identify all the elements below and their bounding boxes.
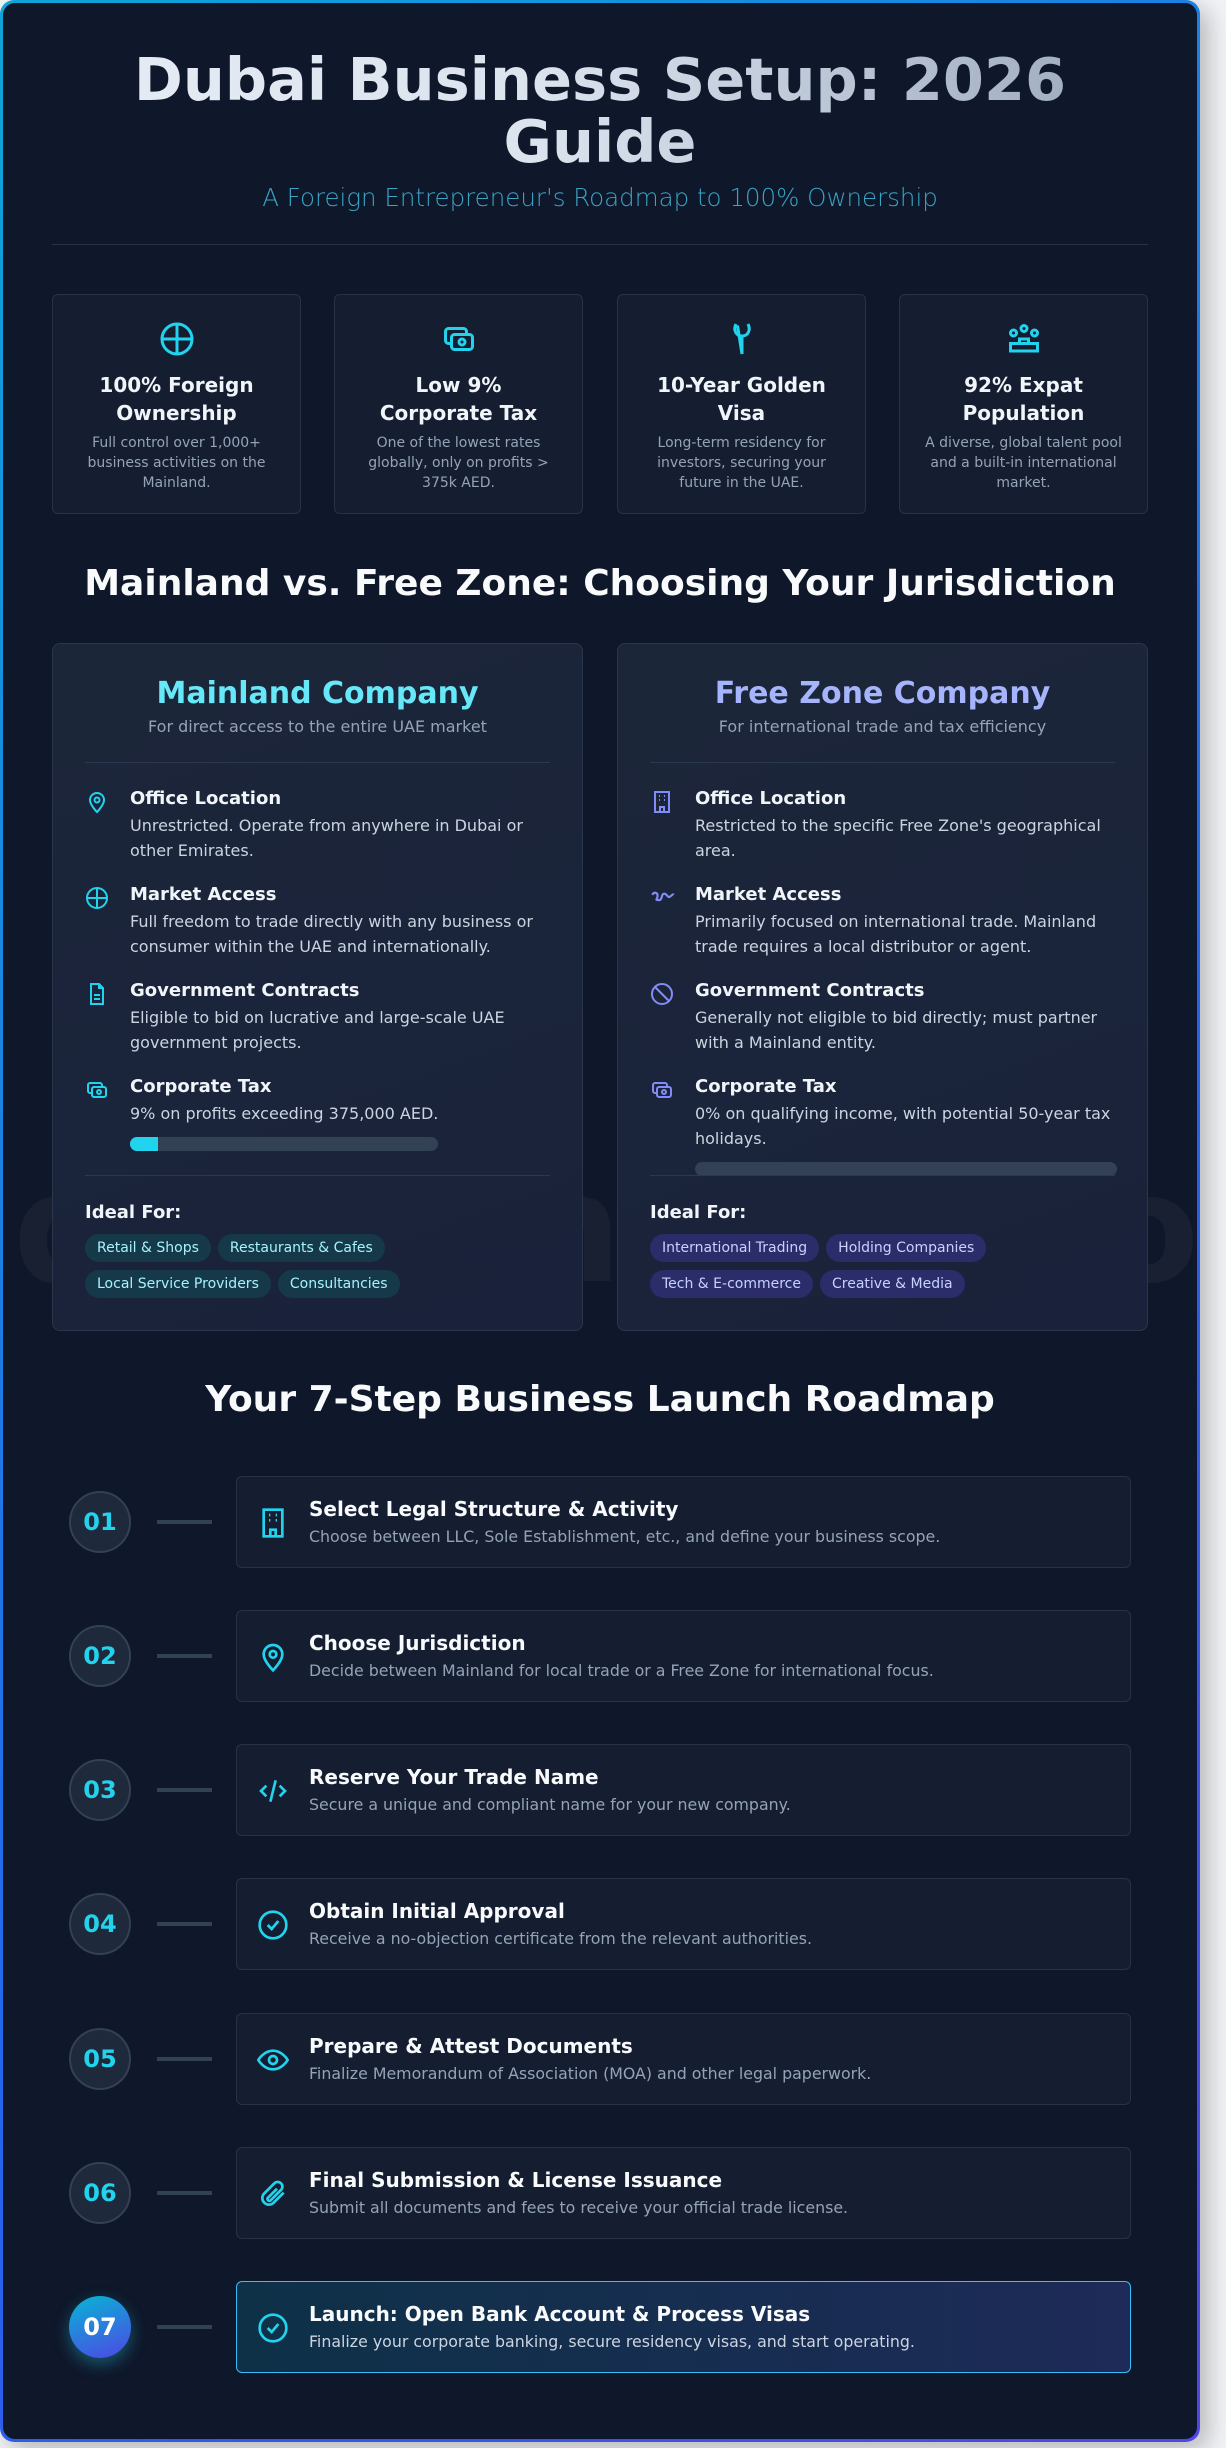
step 5: Finalize Memorandum of Association (MOA) and other legal paperwork. <box>309 2064 871 2083</box>
step 2: Choose Jurisdiction <box>309 1631 526 1655</box>
bar: 0% tax <box>695 1162 1117 1176</box>
title: Guide <box>504 107 696 176</box>
step 2 <box>69 1610 1131 1702</box>
stat: golden visa: Visa <box>718 401 765 425</box>
stat: golden visa: Long-term residency for investors, securing your future in the UAE. <box>657 435 826 491</box>
tags: Restaurants & Cafes <box>230 1240 373 1256</box>
item: government contracts: Generally not eligible to bid directly; must partner with a Mainland entity. <box>695 1008 1097 1052</box>
step 6: Final Submission & License Issuance <box>309 2168 722 2192</box>
step 4: Obtain Initial Approval <box>309 1899 565 1923</box>
item: office location: Restricted to the specific Free Zone's geographical area. <box>695 816 1101 860</box>
panel: mainland: Mainland Company <box>156 676 479 711</box>
step 6: 06 <box>83 2179 117 2207</box>
step 1: 01 <box>83 1508 117 1536</box>
item: office location: Office Location <box>130 788 281 809</box>
bar: 9% tax <box>130 1137 438 1151</box>
stat: corporate tax: One of the lowest rates globally, only on profits > 375k AED. <box>368 435 549 491</box>
icon: people <box>1009 324 1039 352</box>
icon: visa <box>733 323 751 354</box>
item: market access: Full freedom to trade directly with any business or consumer within the UAE and internationally. <box>130 912 533 956</box>
step 3: 03 <box>83 1776 117 1804</box>
step 6 <box>69 2147 1131 2239</box>
ideal for: Ideal For: <box>650 1202 746 1223</box>
tags: Consultancies <box>290 1276 388 1292</box>
step 4 <box>69 1878 1131 1970</box>
item: government contracts <box>90 980 505 1052</box>
step 6: Submit all documents and fees to receive your official trade license. <box>309 2198 848 2217</box>
stat: golden visa: 10-Year Golden <box>657 373 826 397</box>
item: market access: Market Access <box>130 884 276 905</box>
title <box>3 49 1197 173</box>
item: corporate tax <box>87 1076 438 1123</box>
step 3: Secure a unique and compliant name for your new company. <box>309 1795 791 1814</box>
step 7: 07 <box>83 2313 117 2341</box>
stat: golden visa <box>617 294 866 514</box>
item: market access: Primarily focused on international trade. Mainland trade requires a local distributor or agent. <box>695 912 1096 956</box>
stat: foreign ownership: 100% Foreign <box>99 373 254 397</box>
tags <box>650 1234 986 1298</box>
item: government contracts: Eligible to bid on lucrative and large-scale UAE government projects. <box>130 1008 505 1052</box>
stat: foreign ownership: Full control over 1,000+ business activities on the Mainland. <box>88 435 265 491</box>
step 2: Decide between Mainland for local trade or a Free Zone for international focus. <box>309 1661 934 1680</box>
item: corporate tax: Corporate Tax <box>130 1076 272 1097</box>
step 7: Finalize your corporate banking, secure residency visas, and start operating. <box>309 2332 915 2351</box>
tags: Holding Companies <box>838 1240 974 1256</box>
step 4: Receive a no-objection certificate from the relevant authorities. <box>309 1929 812 1948</box>
stat: expat population: Population <box>963 401 1084 425</box>
step 2: 02 <box>83 1642 117 1670</box>
item: government contracts: Government Contracts <box>130 980 359 1001</box>
item: corporate tax: Corporate Tax <box>695 1076 837 1097</box>
stat: corporate tax <box>334 294 583 514</box>
panel: free zone: For international trade and tax efficiency <box>719 717 1046 736</box>
step 3 <box>69 1744 1131 1836</box>
item: market access <box>651 884 1096 956</box>
step 5: 05 <box>83 2045 117 2073</box>
watermark: dbusiness.co <box>13 1143 1197 1317</box>
item: corporate tax: 9% on profits exceeding 375,000 AED. <box>130 1104 438 1123</box>
heading: jurisdiction: Mainland vs. Free Zone: Choosing Your Jurisdiction <box>84 563 1116 604</box>
icon: globe <box>160 322 194 356</box>
tags: International Trading <box>662 1240 807 1256</box>
step 5 <box>69 2013 1131 2105</box>
stat: corporate tax: Low 9% <box>416 373 501 397</box>
item: office location <box>89 788 523 860</box>
panel: mainland <box>52 643 583 1331</box>
tags: Tech & E-commerce <box>662 1276 801 1292</box>
step 1 <box>69 1476 1131 1568</box>
item: market access: Market Access <box>695 884 841 905</box>
step 7: Launch: Open Bank Account & Process Visas <box>309 2302 810 2326</box>
item: office location <box>654 788 1101 860</box>
step 7 <box>61 2281 1131 2373</box>
item: government contracts: Government Contracts <box>695 980 924 1001</box>
tags: Local Service Providers <box>97 1276 259 1292</box>
stat: expat population <box>899 294 1148 514</box>
stat: foreign ownership <box>52 294 301 514</box>
stat: expat population: A diverse, global talent pool and a built-in international market. <box>925 435 1122 491</box>
title: Dubai Business Setup: 2026 <box>134 45 1066 114</box>
item: corporate tax <box>652 1076 1110 1148</box>
tags: Retail & Shops <box>97 1240 199 1256</box>
tags: Creative & Media <box>832 1276 953 1292</box>
panel: free zone: Free Zone Company <box>715 676 1050 711</box>
step 1: Choose between LLC, Sole Establishment, etc., and define your business scope. <box>309 1527 940 1546</box>
heading: roadmap: Your 7-Step Business Launch Roadmap <box>205 1379 995 1420</box>
panel: free zone <box>617 643 1148 1331</box>
icon: money <box>444 327 474 351</box>
step 3: Reserve Your Trade Name <box>309 1765 599 1789</box>
subtitle: A Foreign Entrepreneur's Roadmap to 100% Ownership <box>262 183 938 212</box>
stat: corporate tax: Corporate Tax <box>380 401 537 425</box>
panel: mainland: For direct access to the entire UAE market <box>148 717 487 736</box>
stat: expat population: 92% Expat <box>964 373 1083 397</box>
step 5: Prepare & Attest Documents <box>309 2034 633 2058</box>
tags <box>85 1234 400 1298</box>
item: government contracts <box>651 980 1098 1052</box>
step 1: Select Legal Structure & Activity <box>309 1497 678 1521</box>
item: office location: Unrestricted. Operate from anywhere in Dubai or other Emirates. <box>130 816 523 860</box>
ideal for: Ideal For: <box>85 1202 181 1223</box>
step 4: 04 <box>83 1910 117 1938</box>
item: market access <box>86 884 533 956</box>
item: office location: Office Location <box>695 788 846 809</box>
stat: foreign ownership: Ownership <box>116 401 237 425</box>
item: corporate tax: 0% on qualifying income, with potential 50-year tax holidays. <box>695 1104 1110 1148</box>
